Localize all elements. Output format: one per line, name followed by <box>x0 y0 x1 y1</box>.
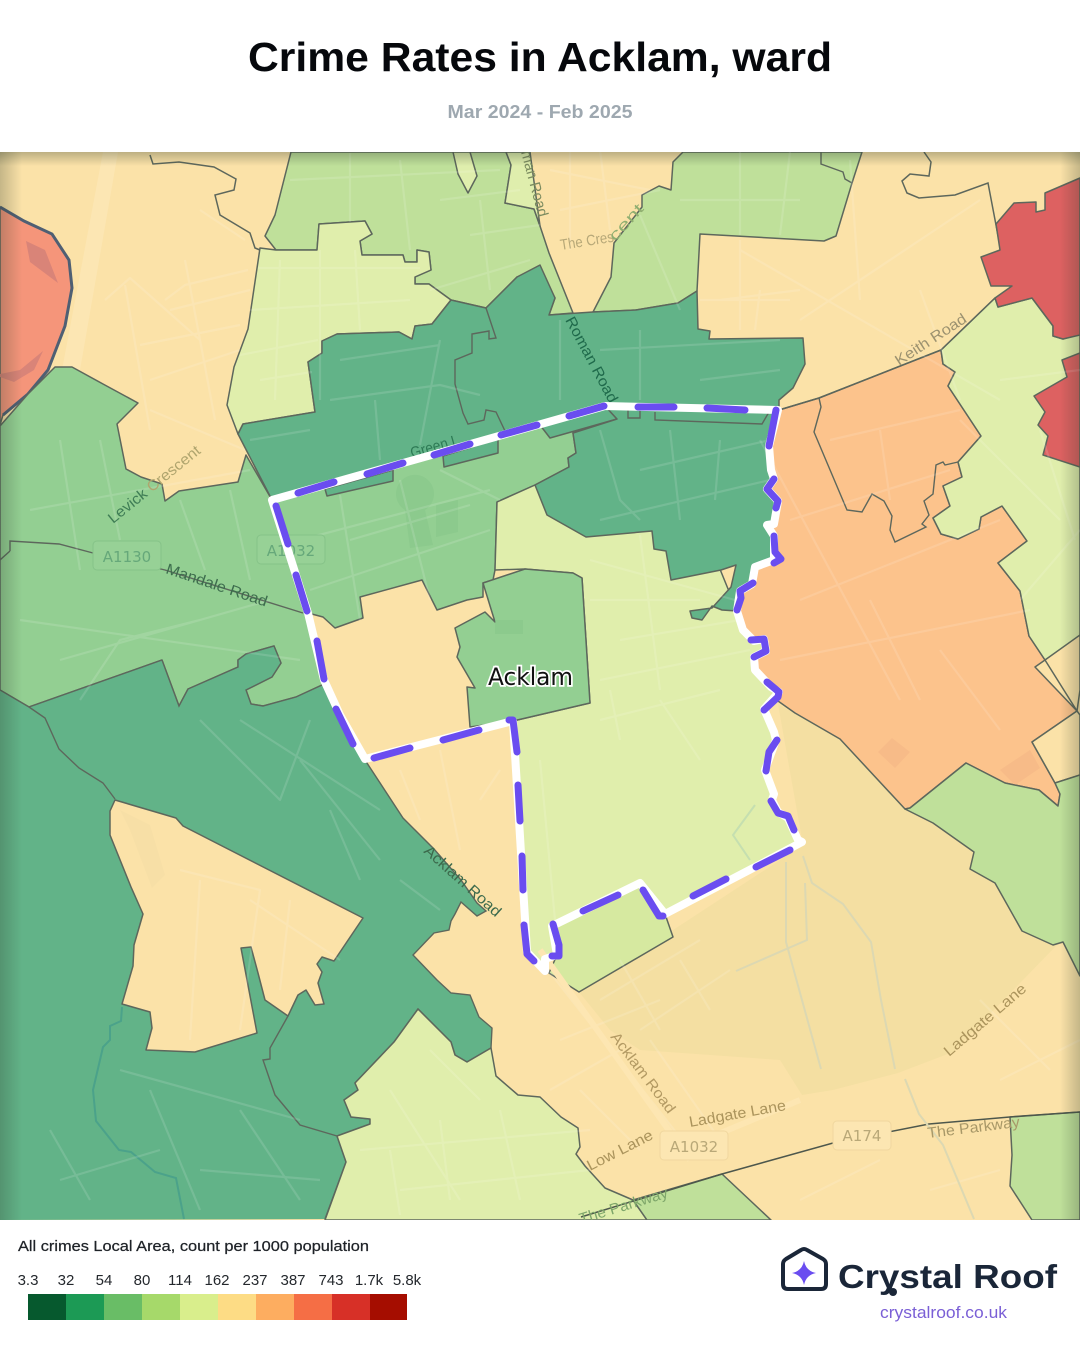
legend tick labels: 114 <box>168 1272 192 1289</box>
area: east cream corner <box>1032 635 1080 783</box>
streams in south-east <box>736 856 974 1219</box>
area: north dark green <box>238 265 805 500</box>
area: east light green <box>905 763 1080 976</box>
area: east orange <box>737 350 1077 809</box>
legend tick labels: 5.8k <box>393 1272 422 1289</box>
area: west mid green <box>0 367 324 707</box>
road labels: cent <box>605 200 648 245</box>
area: north-west yellow-green <box>227 221 451 434</box>
area: ward south pocket <box>549 883 673 992</box>
legend tick labels: 3.3 <box>18 1272 38 1289</box>
road label: The Parkway east: The Parkway <box>926 1114 1021 1142</box>
subtitle: date range: Mar 2024 - Feb 2025 <box>448 102 632 122</box>
place label: Acklam: Acklam <box>488 663 573 691</box>
area: ward north-west mid green <box>277 428 576 629</box>
legend title: All crimes Local Area, count per 1000 population <box>18 1238 369 1255</box>
road label: Levick Crescent: Levick Crescent <box>105 442 205 527</box>
area: river-side high crime zone <box>0 207 72 425</box>
website URL: crystalroof.co.uk <box>880 1304 1008 1322</box>
area: south-east sand <box>579 704 1057 1095</box>
area: south-west cream island <box>110 800 363 1052</box>
road label: Roman Road: Roman Road <box>561 314 621 406</box>
legend tick labels: 237 <box>242 1272 268 1289</box>
logo: Crystal Roof <box>783 1249 1058 1322</box>
road label: Ladgate Lane east: Ladgate Lane <box>941 980 1030 1060</box>
area: north-west light green <box>265 152 573 315</box>
icon: house with star <box>783 1249 826 1289</box>
area: Acklam centre mid green <box>455 569 590 727</box>
area: top centre yellow-green <box>453 152 477 193</box>
road shield: A174 <box>833 1121 891 1150</box>
area: east yellow-green <box>933 298 1080 660</box>
legend tick labels: 1.7k <box>355 1272 384 1289</box>
road shield: A1032 north <box>257 535 325 564</box>
road label: The Crescent: The Cres <box>559 229 615 254</box>
map base: cream areas <box>0 152 1080 1220</box>
area: red high-crime zones <box>981 178 1080 467</box>
area: south light greens <box>633 1112 1080 1220</box>
choropleth map <box>0 149 1080 1228</box>
legend tick labels: 743 <box>318 1272 344 1289</box>
road label: Mandale Road: Mandale Road <box>164 561 270 610</box>
road shield: A1032 south: A1032 <box>670 1138 718 1156</box>
road label: Green Lane: Green L <box>408 432 461 462</box>
ward boundary: white line <box>272 406 802 971</box>
legend tick labels: 80 <box>134 1272 150 1289</box>
legend tick labels: 162 <box>204 1272 230 1289</box>
legend colour scale <box>28 1294 407 1320</box>
road shield: A1032 south <box>660 1131 728 1160</box>
road shield: A1130 <box>93 541 161 570</box>
road label: Roman Road top: man Road <box>517 149 551 219</box>
legend tick labels: 387 <box>280 1272 306 1289</box>
legend tick labels: 54 <box>96 1272 112 1289</box>
road label: Low Lane: Low Lane <box>584 1127 656 1175</box>
street network <box>20 150 1080 1215</box>
legend tick labels: 32 <box>58 1272 74 1289</box>
road label: Acklam Road south: Acklam Road <box>607 1029 679 1117</box>
area: north-east light green <box>593 152 862 312</box>
area: ward north-east dark green <box>535 406 779 620</box>
road label: Keith Road: Keith Road <box>892 310 970 369</box>
legend <box>18 1238 422 1320</box>
road shield: A1032 north: A1032 <box>267 542 315 560</box>
wordmark: Crystal Roof <box>838 1258 1058 1295</box>
road label: Acklam Road north: Acklam Road <box>420 842 505 921</box>
road labels <box>105 149 1030 1228</box>
road label: The Parkway south: The Parkway <box>577 1185 671 1228</box>
area: south-west dark green <box>0 646 492 1220</box>
road shield: A1130: A1130 <box>103 548 151 566</box>
area: ward east yellow-green <box>495 485 802 971</box>
area: south yellow-green <box>325 1009 647 1220</box>
map edge shading <box>0 152 1080 1220</box>
legend tick labels <box>18 1272 422 1289</box>
road label: Ladgate Lane south: Ladgate Lane <box>688 1097 787 1131</box>
ward boundary: purple dashes <box>276 406 794 961</box>
strips of dark green along the ward edge <box>325 406 617 496</box>
road shield: A174: A174 <box>843 1127 881 1145</box>
title: Crime Rates in Acklam, ward <box>248 34 832 80</box>
